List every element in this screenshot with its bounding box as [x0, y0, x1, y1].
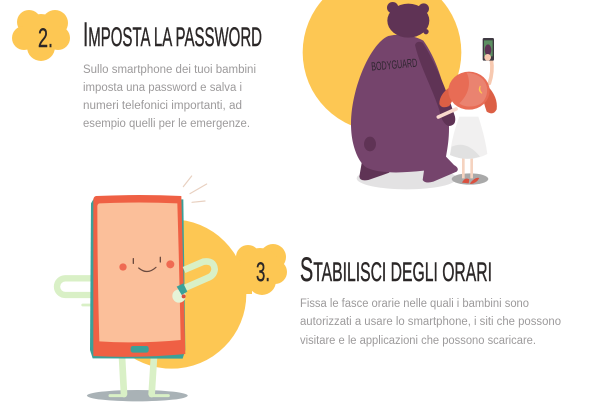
- text block: step 2 description: numeri telefonici importanti, ad: [83, 100, 242, 112]
- ground shadows: [357, 167, 488, 189]
- bear head: [387, 2, 429, 38]
- bear: [351, 2, 458, 183]
- text block: step 3 description: visitare e le applicazioni che possono scaricare.: [300, 335, 536, 347]
- illustration: bear bodyguard and girl: [303, 0, 497, 189]
- yellow circle: [97, 219, 246, 369]
- text block: step 2 description: imposta una password e salva i: [83, 82, 242, 94]
- left arm: [57, 278, 92, 305]
- flower shape: [231, 244, 287, 295]
- hair tie: [479, 86, 482, 93]
- illustration: smiling smartphone: [57, 176, 246, 401]
- bear body: [351, 35, 458, 183]
- girl dress: [450, 117, 487, 159]
- phone front: [93, 195, 185, 357]
- text block: step 2 description: esempio quelli per le emergenze.: [83, 118, 250, 130]
- girl: [438, 38, 497, 184]
- text block: step 3 description: Fissa le fasce orarie nelle quali i bambini sono: [300, 298, 529, 310]
- phone back: [90, 199, 185, 359]
- home button: [131, 346, 149, 353]
- text block: step 3 description: autorizzati a usare lo smartphone, i siti che possono: [300, 316, 561, 328]
- girl raised arm: [489, 59, 492, 83]
- right arm with watch: [172, 261, 215, 303]
- step 3 badge: [231, 244, 287, 295]
- step 2 badge: [12, 10, 70, 61]
- face: [119, 257, 174, 272]
- text block: step 2 description: [83, 64, 256, 130]
- attention rays: [183, 176, 207, 202]
- text block: step 3 description: [300, 298, 561, 347]
- phone screen: [97, 202, 181, 342]
- held smartphone: [483, 38, 494, 61]
- flower shape: [12, 10, 70, 61]
- bodyguard label: BODYGUARD: [371, 56, 418, 74]
- bear arm: [415, 42, 455, 126]
- number 2: 2.: [38, 23, 53, 53]
- bear tail: [364, 137, 376, 151]
- number 3: 3.: [256, 257, 270, 287]
- text block: step 2 description: Sullo smartphone dei tuoi bambini: [83, 64, 256, 76]
- yellow circle: [303, 0, 461, 132]
- heading: imposta la password: IMPOSTA LA PASSWORD: [83, 16, 262, 54]
- girl left arm: [438, 109, 456, 117]
- girl shoes: [462, 178, 479, 184]
- girl head: [448, 72, 490, 110]
- far leg: [359, 153, 389, 180]
- girl legs: [463, 157, 472, 178]
- pigtails: [439, 86, 456, 107]
- legs: [110, 357, 168, 396]
- ground shadow: [87, 390, 188, 401]
